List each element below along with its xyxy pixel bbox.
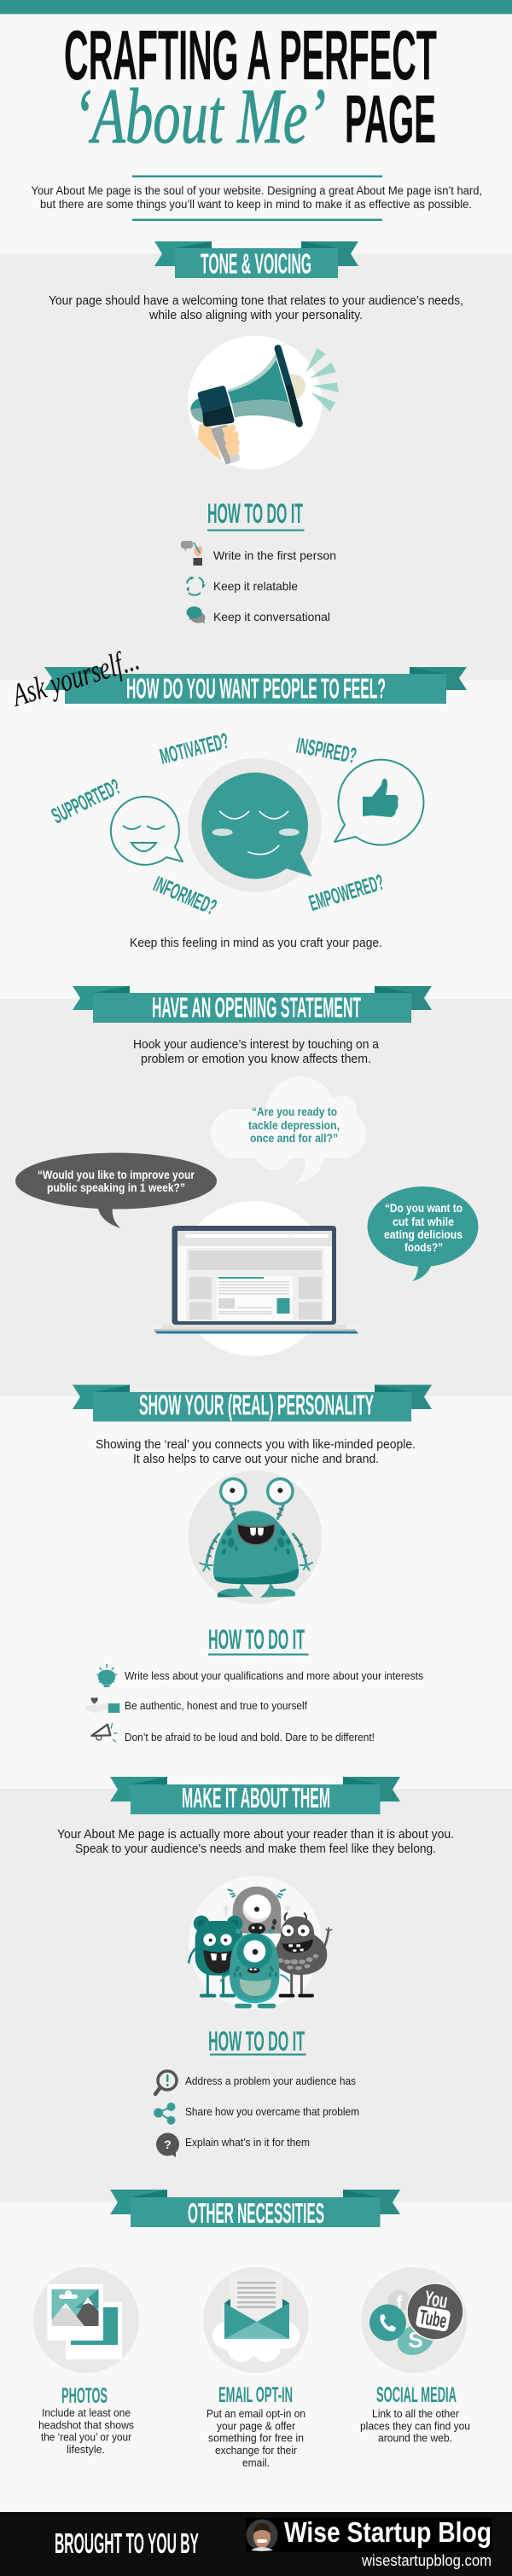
- how to do it heading 2: HOW TO DO IT: [208, 1624, 305, 1655]
- tone paragraph: while also aligning with your personality.: [148, 309, 363, 322]
- back grey monster: [224, 1887, 290, 1935]
- icon: monster group: [189, 1876, 332, 2009]
- icon: social badges: S: [408, 2327, 423, 2353]
- tone paragraph: [49, 294, 463, 322]
- icon: social badges: You: [422, 2287, 450, 2313]
- panel: photos: headshot that shows: [38, 2419, 134, 2431]
- right grey monster: [274, 1913, 332, 1998]
- teal speech bubble: foods?”: [404, 1241, 443, 1254]
- ask yourself script: Ask yourself...: [6, 641, 143, 714]
- feeling note: Keep this feeling in mind as you craft your page.: [130, 937, 382, 950]
- panel: photos: Include at least one: [42, 2407, 131, 2419]
- panel: social media: around the web.: [378, 2433, 452, 2445]
- about them paragraph: Speak to your audience's needs and make them feel like they belong.: [75, 1842, 436, 1856]
- panel: email opt-in: your page & offer: [217, 2421, 295, 2433]
- feelings words: INSPIRED?: [294, 732, 358, 769]
- feelings words: [47, 728, 387, 920]
- panel: email opt-in: [203, 2267, 309, 2469]
- panel: social media: [360, 2267, 470, 2445]
- center teal monster: [220, 1930, 289, 2008]
- ribbon heading: make it about them: MAKE IT ABOUT THEM: [182, 1782, 330, 1813]
- feelings words: INFORMED?: [150, 871, 220, 920]
- list: about them tips: [154, 2071, 359, 2157]
- thought cloud: tackle depression,: [248, 1119, 340, 1132]
- teal speech bubble: [367, 1186, 478, 1281]
- footer: wisestartupblog.com: [361, 2552, 492, 2569]
- icon: laptop: [153, 1201, 358, 1356]
- icon: megaphone in hand: [188, 336, 339, 469]
- title: ‘About Me’: [73, 73, 326, 160]
- list: about them tips: Explain what’s in it for them: [185, 2137, 310, 2149]
- title: [64, 15, 437, 160]
- about them paragraph: Your About Me page is actually more about your reader than it is about you.: [57, 1828, 454, 1842]
- icon: photos: [33, 2267, 139, 2373]
- ribbon heading: how do you want people to feel: [44, 667, 467, 705]
- ribbon heading: make it about them: [110, 1777, 400, 1814]
- panel: email opt-in: something for free in: [208, 2433, 304, 2445]
- how to do it heading 3: [208, 2026, 305, 2057]
- icon: envelope: [203, 2267, 309, 2373]
- tone paragraph: Your page should have a welcoming tone that relates to your audience’s needs,: [49, 294, 463, 308]
- teal speech bubble: cut fat while: [393, 1215, 454, 1228]
- text: EMPOWERED?: [305, 869, 387, 916]
- left bear monster: [189, 1916, 243, 1998]
- how to do it heading 3: HOW TO DO IT: [208, 2026, 305, 2057]
- panel: email opt-in: email.: [242, 2457, 270, 2469]
- icon: circular arrows: [186, 577, 206, 595]
- intro text: but there are some things you’ll want to keep in mind to make it as effective as possible.: [40, 198, 472, 211]
- how to do it heading 2: [208, 1624, 309, 1656]
- thought cloud: once and for all?”: [250, 1132, 338, 1145]
- ribbon heading: other necessities: [110, 2190, 400, 2229]
- icon: question bubble: [156, 2132, 179, 2157]
- icon: heart and book: [85, 1697, 119, 1713]
- intro text: Your About Me page is the soul of your website. Designing a great About Me page isn’t hard,: [31, 184, 482, 197]
- panel: email opt-in: Put an email opt-in on: [207, 2408, 305, 2420]
- how to do it heading 1: HOW TO DO IT: [207, 498, 303, 529]
- icon: chat bubbles: [186, 606, 205, 624]
- thought cloud: “Are you ready to: [252, 1105, 337, 1118]
- heading: photos: PHOTOS: [61, 2384, 108, 2408]
- feelings words: SUPPORTED?: [47, 774, 125, 828]
- teal speech bubble: eating delicious: [384, 1228, 463, 1241]
- dark speech bubble: public speaking in 1 week?”: [47, 1181, 185, 1194]
- personality paragraph: It also helps to carve out your niche and brand.: [133, 1453, 379, 1466]
- personality paragraph: Showing the ‘real’ you connects you with like-minded people.: [96, 1438, 416, 1452]
- ribbon heading: tone and voicing: [154, 241, 358, 280]
- ribbon heading: real personality: [73, 1385, 432, 1421]
- list: about them tips: Share how you overcame that problem: [185, 2106, 359, 2118]
- panel: photos: the ‘real you’ or your: [41, 2431, 131, 2443]
- thought cloud: [211, 1076, 366, 1184]
- ribbon heading: other necessities: OTHER NECESSITIES: [188, 2197, 324, 2229]
- list: tone tips: Write in the first person: [213, 548, 336, 562]
- how to do it heading 1: [207, 498, 304, 531]
- icon: share: [154, 2103, 176, 2125]
- list: tone tips: Keep it relatable: [213, 579, 298, 593]
- icon: light bulb: [96, 1664, 117, 1687]
- icon: magnifier: [155, 2071, 177, 2094]
- teal speech bubble: “Do you want to: [385, 1202, 463, 1215]
- ribbon heading: tone and voicing: TONE & VOICING: [201, 247, 311, 280]
- footer: BROUGHT TO YOU BY: [55, 2527, 199, 2559]
- list: tone tips: Keep it conversational: [213, 610, 330, 624]
- icon: thumbs up bubble: [335, 760, 423, 845]
- dark speech bubble: [15, 1153, 217, 1228]
- list: tone tips: [181, 541, 336, 624]
- logo block: [246, 2516, 492, 2552]
- list: personality tips: Be authentic, honest and true to yourself: [125, 1700, 308, 1712]
- icon: small megaphone: [91, 1723, 117, 1742]
- list: about them tips: Address a problem your audience has: [185, 2075, 356, 2087]
- opening paragraph: Hook your audience’s interest by touching on a: [133, 1038, 380, 1052]
- feelings words: MOTIVATED?: [157, 728, 231, 769]
- panel: photos: lifestyle.: [67, 2444, 105, 2456]
- personality paragraph: [96, 1438, 416, 1466]
- icon: social badges: [362, 2267, 468, 2373]
- icon: question bubble: ?: [164, 2138, 172, 2151]
- panel: social media: places they can find you: [360, 2421, 470, 2433]
- icon: left outline face: [111, 797, 183, 865]
- about them paragraph: [57, 1828, 454, 1856]
- panel: photos: [33, 2267, 139, 2456]
- opening paragraph: problem or emotion you know affects them.: [141, 1053, 371, 1066]
- ribbon heading: opening statement: [73, 986, 432, 1024]
- intro text: [31, 184, 482, 211]
- list: personality tips: Don’t be afraid to be loud and bold. Dare to be different!: [125, 1732, 375, 1743]
- list: personality tips: [85, 1664, 423, 1743]
- icon: social badges: f: [396, 2292, 403, 2313]
- icon: teal monster: [188, 1471, 323, 1604]
- list: personality tips: Write less about your qualifications and more about your interests: [125, 1670, 423, 1682]
- icon: writing hand: [181, 541, 202, 566]
- dark speech bubble: “Would you like to improve your: [38, 1169, 195, 1181]
- panel: email opt-in: exchange for their: [215, 2445, 297, 2457]
- footer: [0, 2512, 512, 2576]
- opening paragraph: [133, 1038, 380, 1066]
- icon: central smiling speech bubble: [188, 758, 322, 892]
- icon: social badges: Tube: [417, 2306, 448, 2333]
- panel: social media: Link to all the other: [372, 2408, 459, 2420]
- heading: email opt-in: EMAIL OPT-IN: [218, 2383, 293, 2407]
